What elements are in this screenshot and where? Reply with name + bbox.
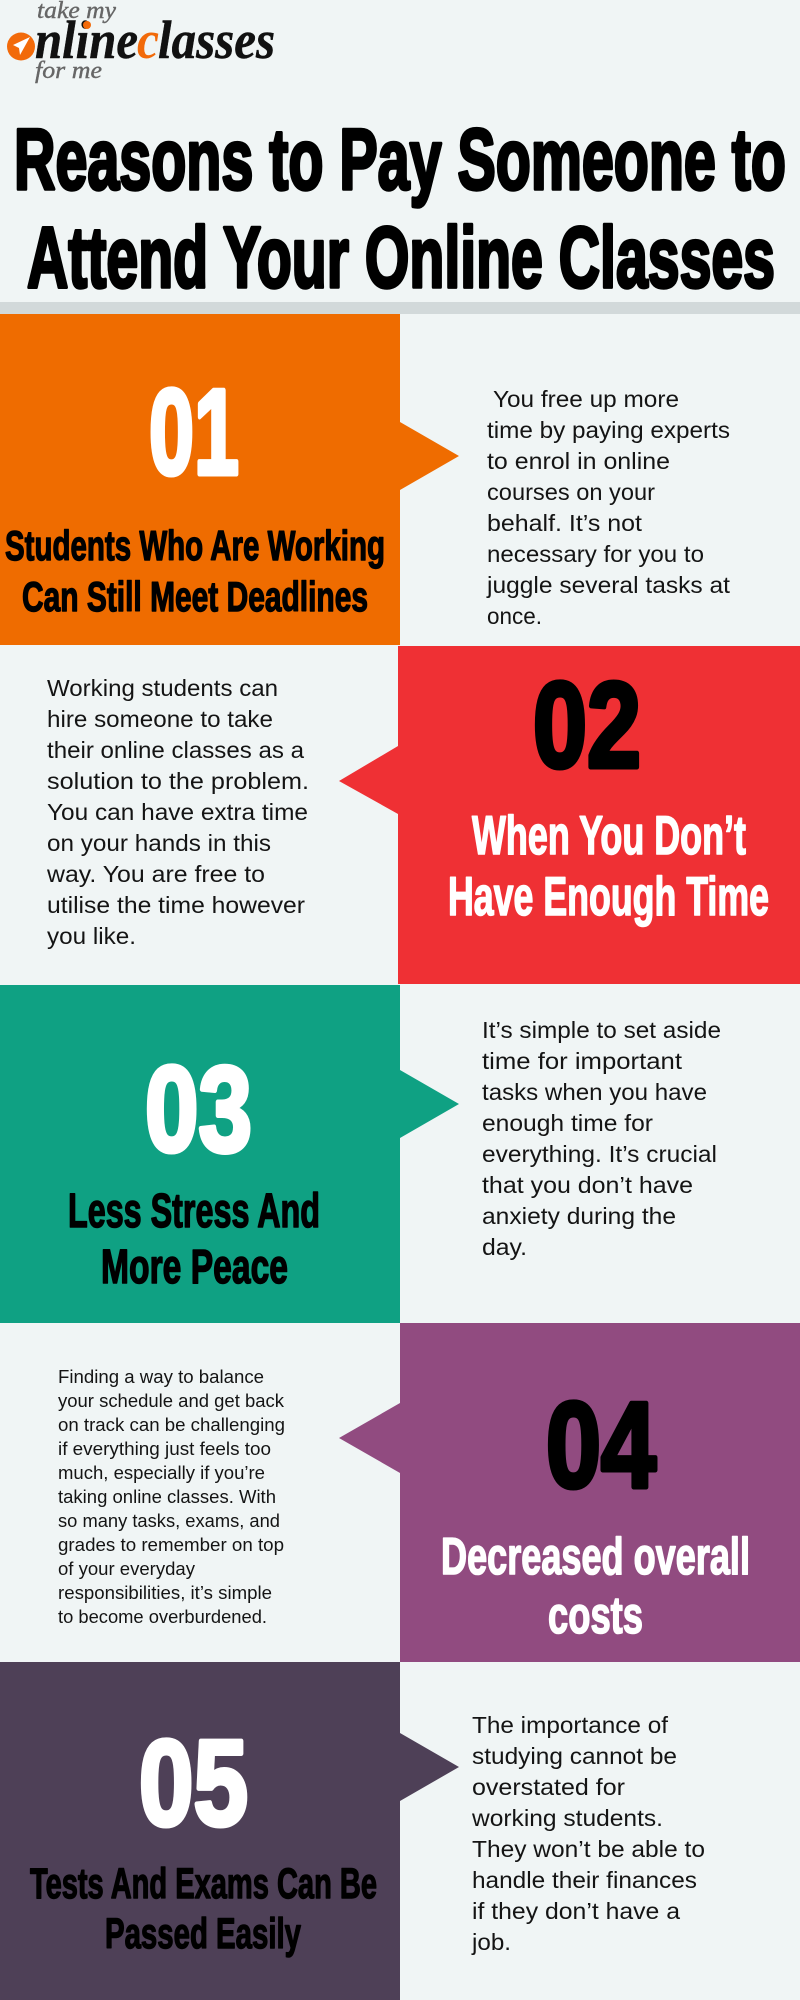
text: reason 05 body: The importance of [472, 1712, 668, 1738]
text: reason 01 body: behalf. It’s not [487, 510, 642, 536]
heading 04: costs [548, 1587, 643, 1645]
heading 05: Tests And Exams Can Be [30, 1860, 377, 1908]
text: reason 03 body [482, 1017, 721, 1260]
heading 05: Passed Easily [105, 1910, 301, 1958]
text: reason 02 body: on your hands in this [47, 830, 271, 856]
logo: take my online classes for me: nline [35, 10, 138, 70]
text: reason 02 body: hire someone to take [47, 706, 273, 732]
panel: reason 03 [0, 985, 459, 1323]
panel: reason 02 [339, 646, 800, 984]
text: reason 02 body: solution to the problem. [47, 768, 309, 794]
text: reason 02 body: Working students can [47, 675, 278, 701]
text: reason 04 body: your schedule and get back [58, 1391, 285, 1411]
number 01: 01 [149, 364, 239, 500]
text: reason 03 body: everything. It’s crucial [482, 1141, 717, 1167]
text: reason 04 body: taking online classes. With [58, 1487, 276, 1507]
number 03: 03 [145, 1041, 252, 1177]
number 04: 04 [546, 1377, 656, 1513]
text: reason 05 body: studying cannot be [472, 1743, 677, 1769]
text: reason 01 body: necessary for you to [487, 541, 704, 567]
text: reason 02 body [46, 675, 309, 949]
logo: take my online classes for me [7, 0, 275, 84]
heading 01: Can Still Meet Deadlines [22, 573, 368, 620]
heading 01: Students Who Are Working [5, 522, 385, 569]
logo: take my online classes for me: lasses [158, 10, 275, 70]
text: reason 04 body: so many tasks, exams, and [58, 1511, 280, 1531]
text: reason 05 body: working students. [471, 1805, 663, 1831]
panel: reason 05 [0, 1662, 459, 2000]
heading 01 [5, 522, 385, 620]
text: reason 03 body: anxiety during the [482, 1203, 676, 1229]
text: reason 04 body: if everything just feels too [58, 1439, 271, 1459]
icon: orange circle with paper plane [7, 32, 35, 60]
text: reason 03 body: It’s simple to set aside [482, 1017, 721, 1043]
text: reason 04 body: to become overburdened. [58, 1607, 267, 1627]
text: reason 02 body: You can have extra time [47, 799, 308, 825]
text: reason 03 body: time for important [482, 1048, 683, 1074]
text: reason 01 body: to enrol in online [487, 448, 670, 474]
text: reason 03 body: enough time for [482, 1110, 653, 1136]
text: reason 01 body: juggle several tasks at [486, 572, 730, 598]
heading 02 [448, 804, 769, 927]
logo: take my online classes for me: for me [35, 58, 102, 84]
number 05: 05 [139, 1715, 248, 1851]
logo: take my online classes for me: c [137, 10, 159, 70]
text: reason 02 body: utilise the time however [47, 892, 305, 918]
text: reason 01 body: courses on your [487, 479, 655, 505]
text: reason 04 body: responsibilities, it’s simple [58, 1583, 272, 1603]
text: reason 05 body [471, 1712, 705, 1955]
text: reason 01 body [486, 386, 730, 629]
text: reason 03 body: that you don’t have [482, 1172, 693, 1198]
text: reason 05 body: They won’t be able to [472, 1836, 705, 1862]
text: reason 05 body: handle their finances [472, 1867, 697, 1893]
text: reason 04 body: on track can be challenging [58, 1415, 285, 1435]
text: reason 01 body: once. [487, 603, 542, 629]
text: reason 04 body: much, especially if you’re [58, 1463, 265, 1483]
text: reason 05 body: job. [471, 1929, 511, 1955]
number 02: 02 [533, 657, 641, 793]
title [14, 112, 786, 306]
text: reason 01 body: You free up more [493, 386, 679, 412]
heading 05 [30, 1860, 377, 1958]
heading 04 [441, 1528, 750, 1645]
heading 03: More Peace [101, 1241, 288, 1294]
text: reason 02 body: their online classes as a [47, 737, 305, 763]
text: reason 04 body: of your everyday [58, 1559, 195, 1579]
text: reason 05 body: overstated for [472, 1774, 625, 1800]
text: reason 04 body [58, 1367, 285, 1627]
text: reason 04 body: Finding a way to balance [58, 1367, 264, 1387]
panel: reason 01 [0, 314, 459, 645]
text: reason 04 body: grades to remember on top [58, 1535, 284, 1555]
text: reason 01 body: time by paying experts [487, 417, 730, 443]
heading 03: Less Stress And [68, 1185, 320, 1238]
text: reason 05 body: if they don’t have a [472, 1898, 681, 1924]
text: reason 02 body: you like. [47, 923, 136, 949]
text: reason 02 body: way. You are free to [46, 861, 265, 887]
heading 03 [68, 1185, 320, 1294]
panel: reason 04 [339, 1323, 800, 1662]
text: reason 03 body: day. [482, 1234, 527, 1260]
text: reason 03 body: tasks when you have [482, 1079, 707, 1105]
